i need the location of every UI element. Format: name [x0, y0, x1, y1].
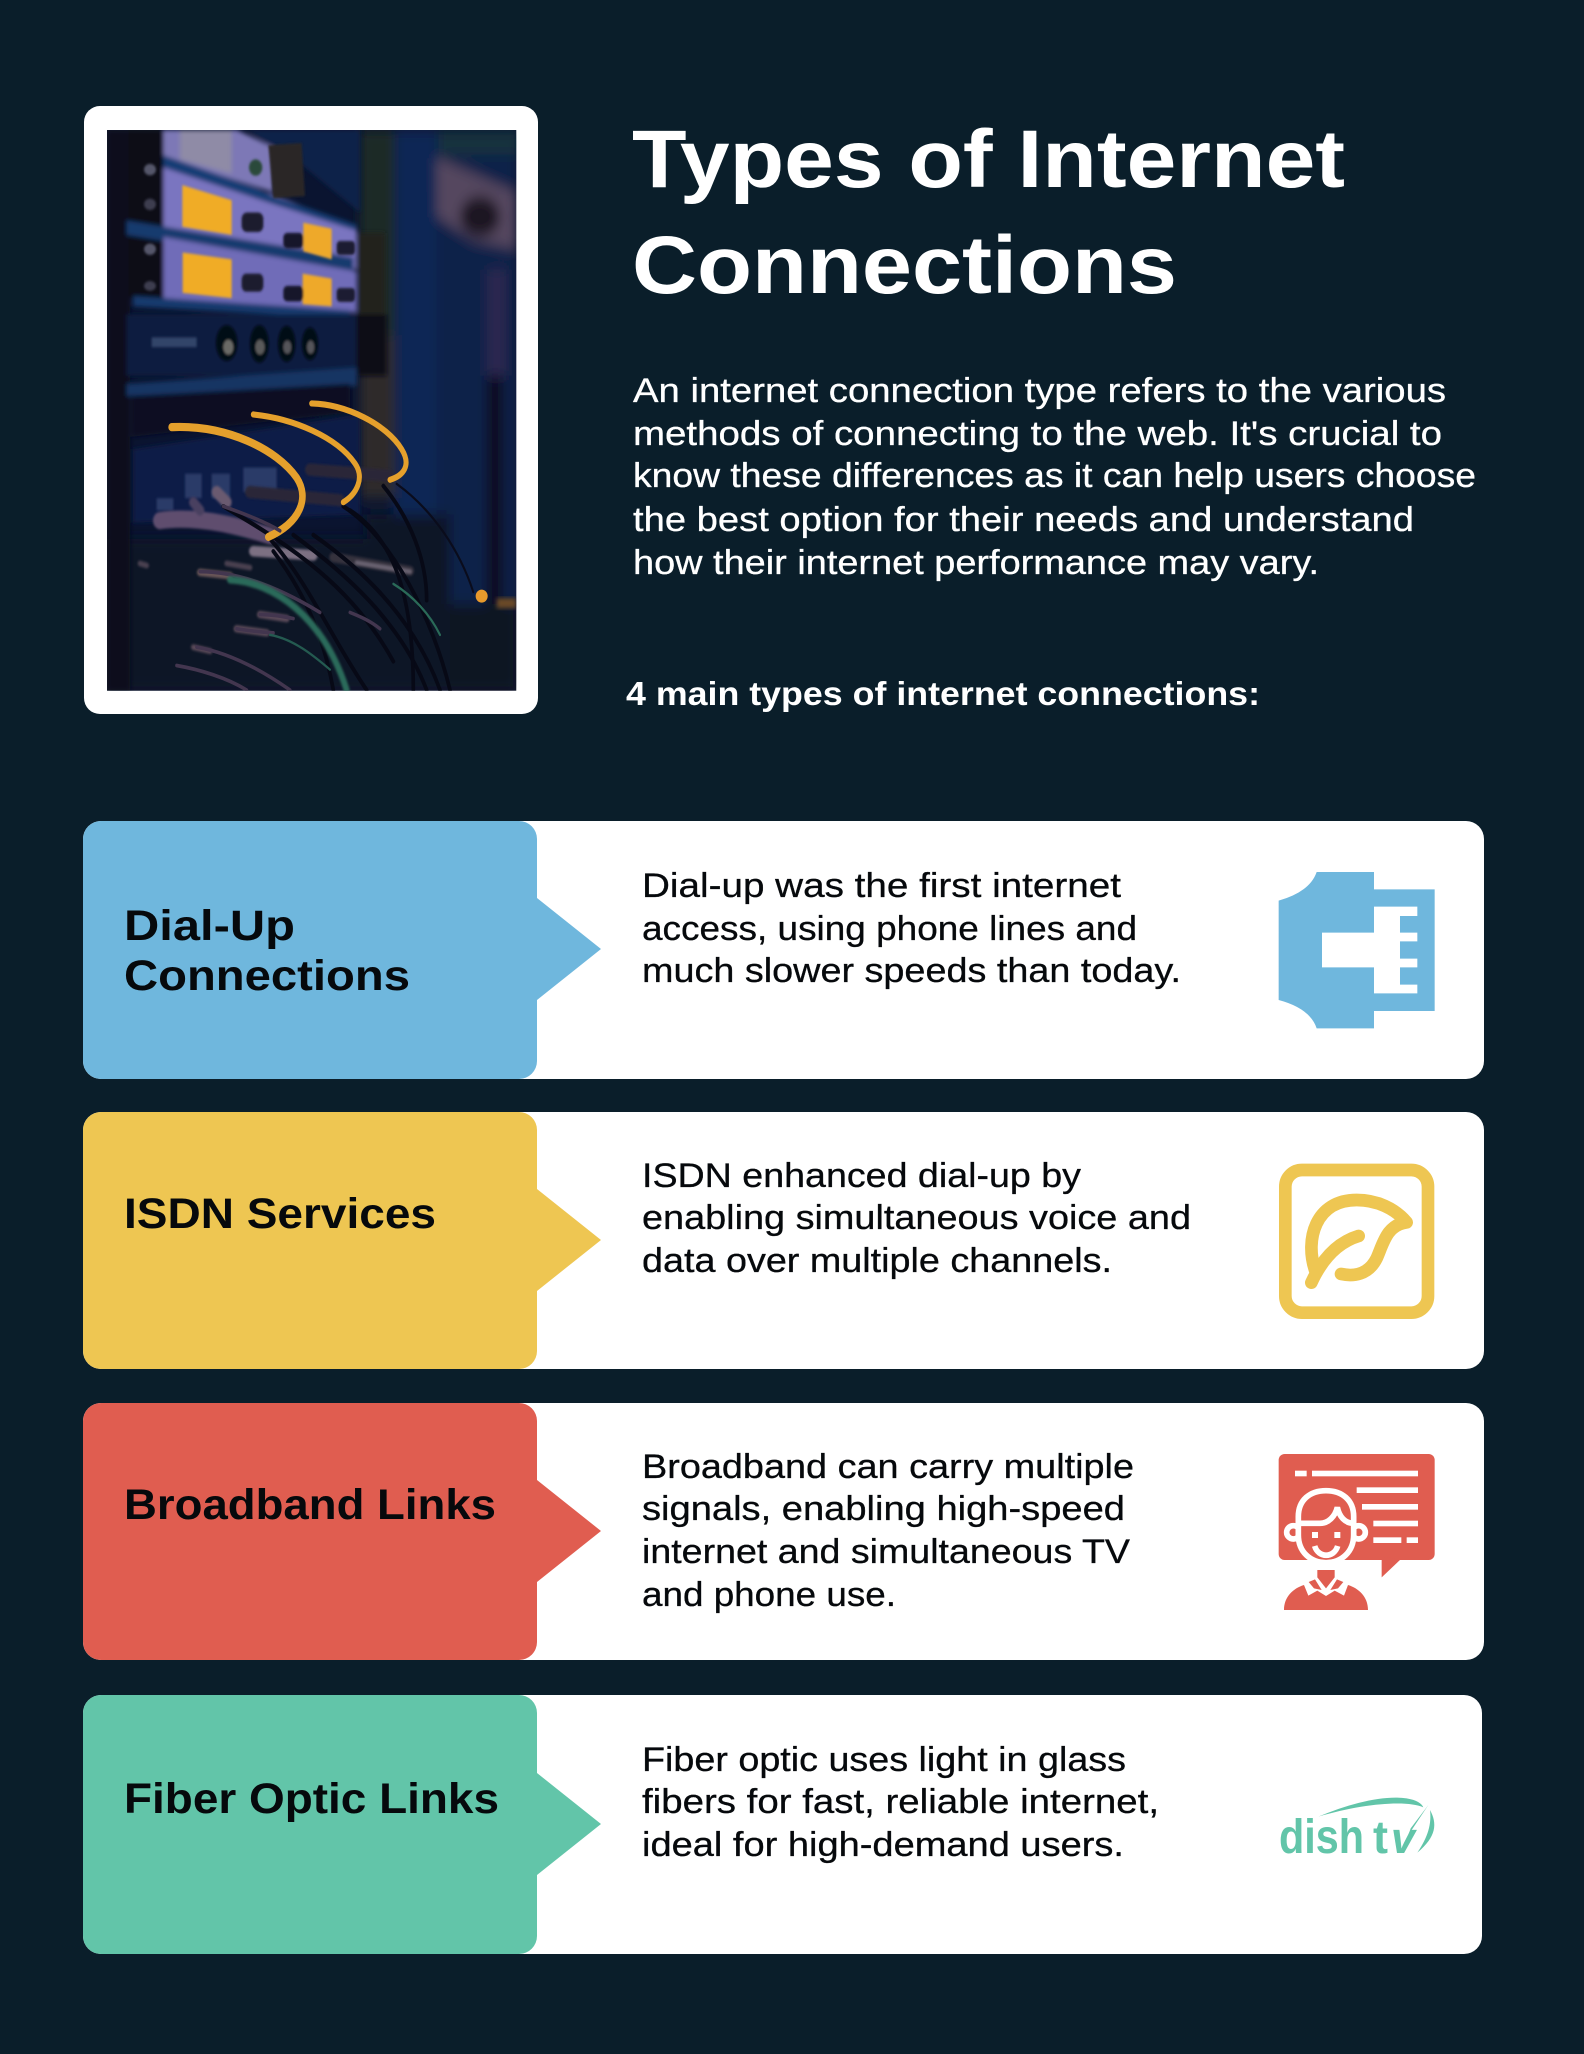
description: fiber optic: fibers for fast, reliable internet,	[642, 1783, 1159, 1821]
icon: leaf in rounded square	[1285, 1170, 1428, 1313]
title	[632, 114, 1345, 311]
heading: fiber optic: Fiber Optic Links	[124, 1775, 499, 1823]
description: broadband	[642, 1448, 1134, 1614]
description: broadband: signals, enabling high-speed	[642, 1490, 1125, 1528]
description: isdn: ISDN enhanced dial-up by	[642, 1157, 1081, 1195]
icon: dish tv logo: v	[1391, 1814, 1417, 1863]
title: Connections	[632, 220, 1177, 311]
label tab: broadband	[83, 1403, 601, 1660]
description: isdn	[642, 1157, 1191, 1280]
intro paragraph: how their internet performance may vary.	[633, 544, 1319, 582]
intro paragraph: the best option for their needs and understand	[633, 501, 1414, 539]
icon: dish tv logo: t	[1373, 1811, 1388, 1863]
description: dial-up	[642, 867, 1181, 990]
intro paragraph	[633, 372, 1476, 582]
label tab: fiber optic	[83, 1695, 601, 1954]
heading: broadband: Broadband Links	[124, 1481, 496, 1529]
panel: broadband links	[83, 1403, 1484, 1660]
heading: isdn: ISDN Services	[124, 1190, 436, 1238]
subheading: 4 main types of internet connections:	[626, 675, 1260, 712]
label tab: dial-up	[83, 821, 601, 1079]
icon: dish tv logo: dish	[1279, 1811, 1364, 1864]
panel: fiber optic links	[83, 1695, 1482, 1954]
icon: dish tv logo	[1279, 1798, 1434, 1864]
label tab: isdn	[83, 1112, 601, 1369]
panel: isdn services	[83, 1112, 1484, 1369]
photo frame: network rack with cables	[84, 106, 538, 714]
description: isdn: enabling simultaneous voice and	[642, 1199, 1191, 1237]
icon: ethernet plug	[1279, 872, 1435, 1028]
description: dial-up: access, using phone lines and	[642, 910, 1137, 948]
heading: dial-up	[124, 902, 410, 1000]
description: fiber optic: Fiber optic uses light in glass	[642, 1741, 1126, 1779]
description: broadband: internet and simultaneous TV	[642, 1533, 1130, 1571]
description: dial-up: Dial-up was the first internet	[642, 867, 1122, 905]
heading: dial-up: Connections	[124, 952, 410, 1000]
heading: dial-up: Dial-Up	[124, 902, 295, 950]
description: broadband: Broadband can carry multiple	[642, 1448, 1134, 1486]
title: Types of Internet	[632, 114, 1345, 205]
description: fiber optic: ideal for high-demand users.	[642, 1826, 1124, 1864]
intro paragraph: An internet connection type refers to the various	[633, 372, 1446, 410]
intro paragraph: know these differences as it can help users choose	[633, 457, 1476, 495]
description: dial-up: much slower speeds than today.	[642, 952, 1181, 990]
description: fiber optic	[642, 1741, 1159, 1864]
icon: person with speech bubble	[1279, 1454, 1435, 1610]
intro paragraph: methods of connecting to the web. It's crucial to	[633, 415, 1442, 453]
description: broadband: and phone use.	[642, 1576, 896, 1614]
description: isdn: data over multiple channels.	[642, 1242, 1112, 1280]
panel: dial-up connections	[83, 821, 1484, 1079]
